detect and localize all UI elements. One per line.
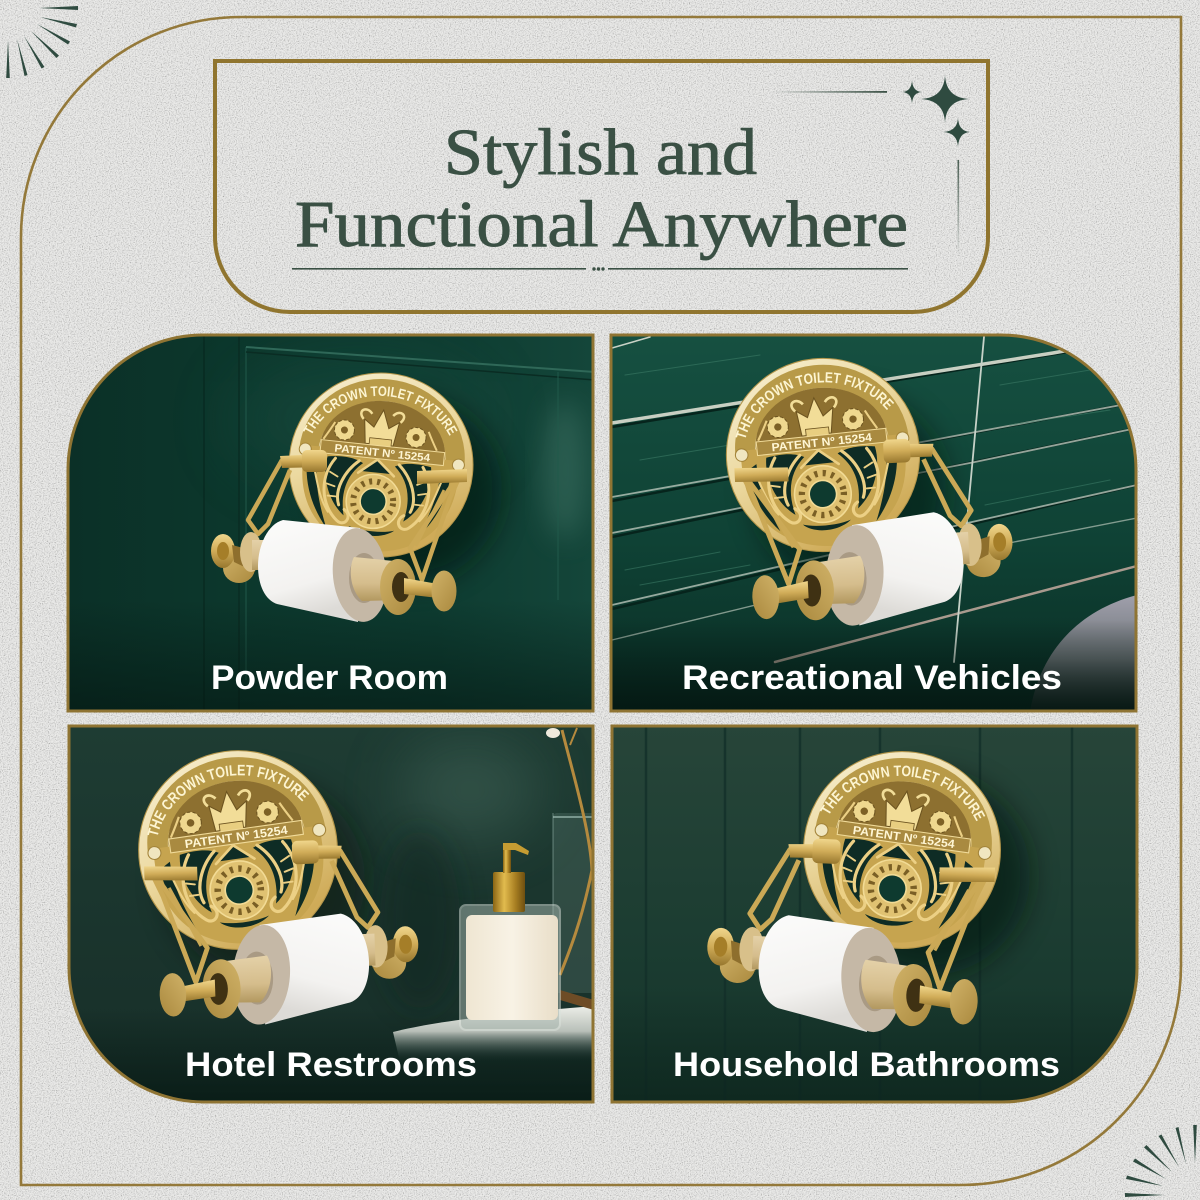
shelf <box>393 1007 592 1056</box>
product: crown toilet roll holder: THE CROWN TOILET FIXTURE <box>303 386 458 436</box>
label: Powder Room <box>211 659 448 697</box>
title: Functional Anywhere <box>295 188 908 261</box>
product: crown toilet roll holder <box>726 358 1012 626</box>
panel: household bathrooms <box>610 724 1138 1104</box>
label: Household Bathrooms <box>673 1046 1060 1084</box>
panel: hotel restrooms <box>68 724 594 1104</box>
panel: powder room <box>66 334 594 712</box>
soap bottle <box>460 843 560 1030</box>
title <box>295 116 908 261</box>
panel border <box>611 335 1136 711</box>
panel border <box>69 726 593 1102</box>
decorative fading lines <box>771 91 959 257</box>
product: crown toilet roll holder: THE CROWN TOILET FIXTURE <box>820 766 986 822</box>
icon: sparkles <box>902 75 970 147</box>
product: crown toilet roll holder: PATENT Nº 15254 <box>771 432 873 454</box>
icon: sun rays bottom right <box>1125 1125 1197 1197</box>
product: crown toilet roll holder: THE CROWN TOILET FIXTURE <box>147 764 310 836</box>
product: crown toilet roll holder <box>211 372 474 622</box>
panel: recreational vehicles <box>610 334 1138 712</box>
product: crown toilet roll holder: PATENT Nº 15254 <box>852 824 956 851</box>
product: crown toilet roll holder <box>707 751 1001 1032</box>
title underline with dots <box>292 267 908 271</box>
label: Recreational Vehicles <box>682 659 1062 697</box>
product: crown toilet roll holder: THE CROWN TOILET FIXTURE <box>736 372 894 438</box>
product: crown toilet roll holder: PATENT Nº 15254 <box>184 823 289 851</box>
label: Hotel Restrooms <box>185 1046 477 1084</box>
jar and stems <box>546 728 595 1010</box>
title: Stylish and <box>444 116 757 189</box>
panel border <box>612 726 1137 1102</box>
panel border <box>68 335 593 711</box>
product: crown toilet roll holder: PATENT Nº 15254 <box>334 443 431 465</box>
icon: sun rays top left <box>6 6 78 78</box>
product: crown toilet roll holder <box>138 750 418 1024</box>
panel: title box <box>215 61 988 312</box>
